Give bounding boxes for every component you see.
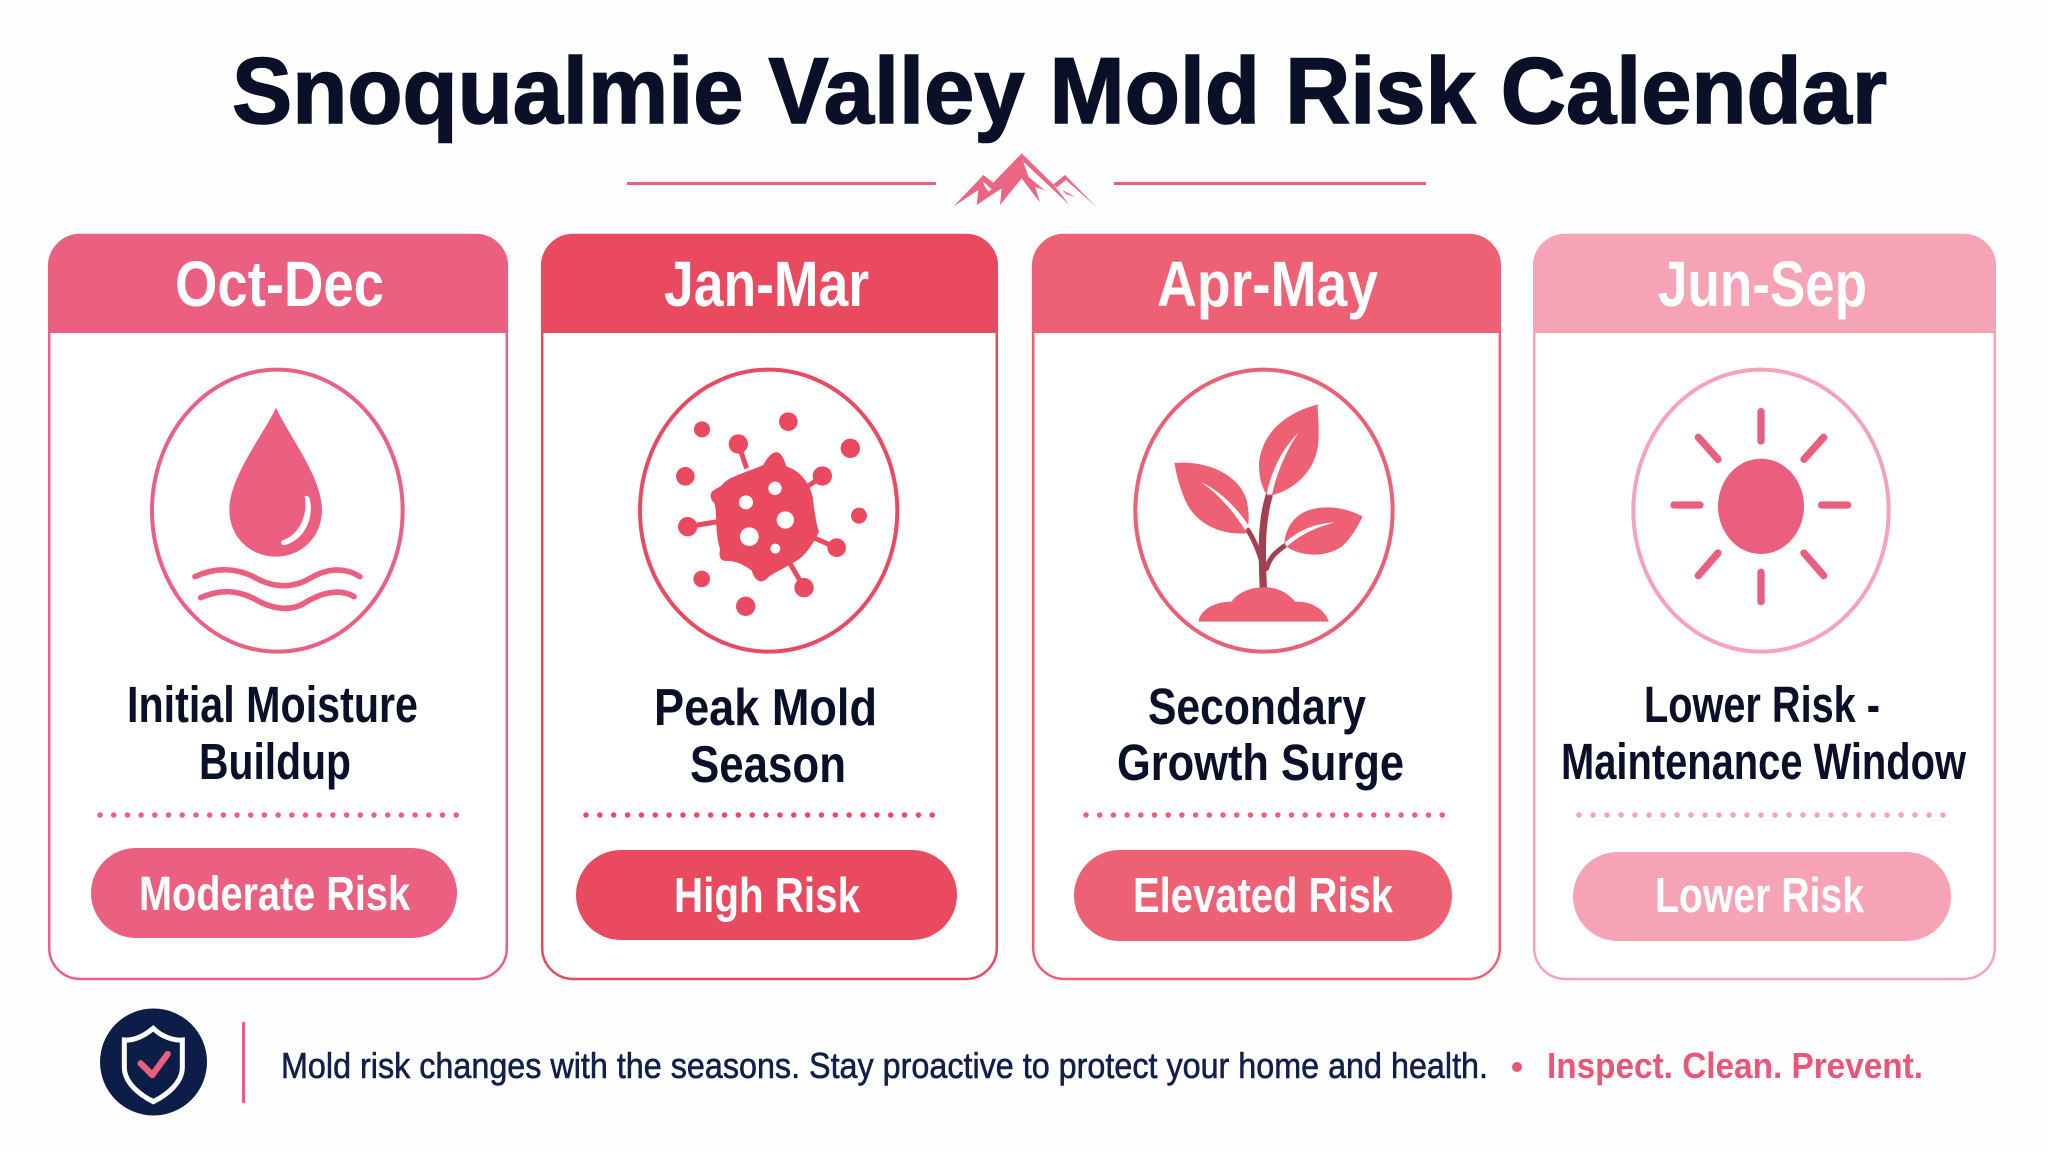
icon: sprouting plant xyxy=(1135,370,1393,652)
description xyxy=(1117,678,1404,791)
description: Secondary xyxy=(1148,678,1367,735)
card header xyxy=(1533,234,1996,333)
icon: mountains xyxy=(953,153,1096,207)
description xyxy=(127,676,418,790)
icon: mold spore xyxy=(640,370,897,652)
call to action: Inspect. Clean. Prevent. xyxy=(1547,1045,1923,1086)
icon: shield with check xyxy=(100,1008,207,1116)
risk badge: Moderate Risk xyxy=(139,868,410,921)
card header xyxy=(48,234,508,333)
description: Growth Surge xyxy=(1117,734,1404,791)
month label: Apr-May xyxy=(1157,248,1378,320)
description xyxy=(654,679,877,794)
risk badge: High Risk xyxy=(674,869,861,923)
card header xyxy=(1032,234,1501,333)
footer xyxy=(100,1008,1923,1116)
footer message: Mold risk changes with the seasons. Stay proactive to protect your home and health. xyxy=(281,1045,1488,1086)
panel: Apr-May xyxy=(1032,234,1501,979)
description: Season xyxy=(690,736,846,794)
description: Peak Mold xyxy=(654,679,877,737)
description xyxy=(1561,676,1966,790)
title divider with mountain icon xyxy=(627,153,1426,207)
description: Lower Risk - xyxy=(1644,676,1880,733)
month label: Jan-Mar xyxy=(664,248,869,320)
card outline xyxy=(49,235,507,979)
description: Buildup xyxy=(199,733,351,790)
description: Initial Moisture xyxy=(127,676,418,733)
icon: sun xyxy=(1633,370,1889,652)
card outline xyxy=(542,235,997,979)
risk badge xyxy=(576,850,957,940)
month label: Jun-Sep xyxy=(1658,248,1867,320)
card outline xyxy=(1534,235,1995,979)
risk badge xyxy=(1573,852,1951,941)
panel: Jan-Mar xyxy=(541,234,998,979)
card outline xyxy=(1033,235,1500,979)
risk badge: Lower Risk xyxy=(1655,869,1865,923)
panel: Oct-Dec xyxy=(48,234,508,979)
icon: water drop and waves xyxy=(152,370,403,652)
risk badge xyxy=(91,848,457,938)
panel: Jun-Sep xyxy=(1533,234,1996,979)
risk badge xyxy=(1074,850,1452,941)
risk badge: Elevated Risk xyxy=(1133,869,1394,923)
month label: Oct-Dec xyxy=(175,248,384,320)
title: Snoqualmie Valley Mold Risk Calendar xyxy=(232,38,1887,143)
card header xyxy=(541,234,998,333)
